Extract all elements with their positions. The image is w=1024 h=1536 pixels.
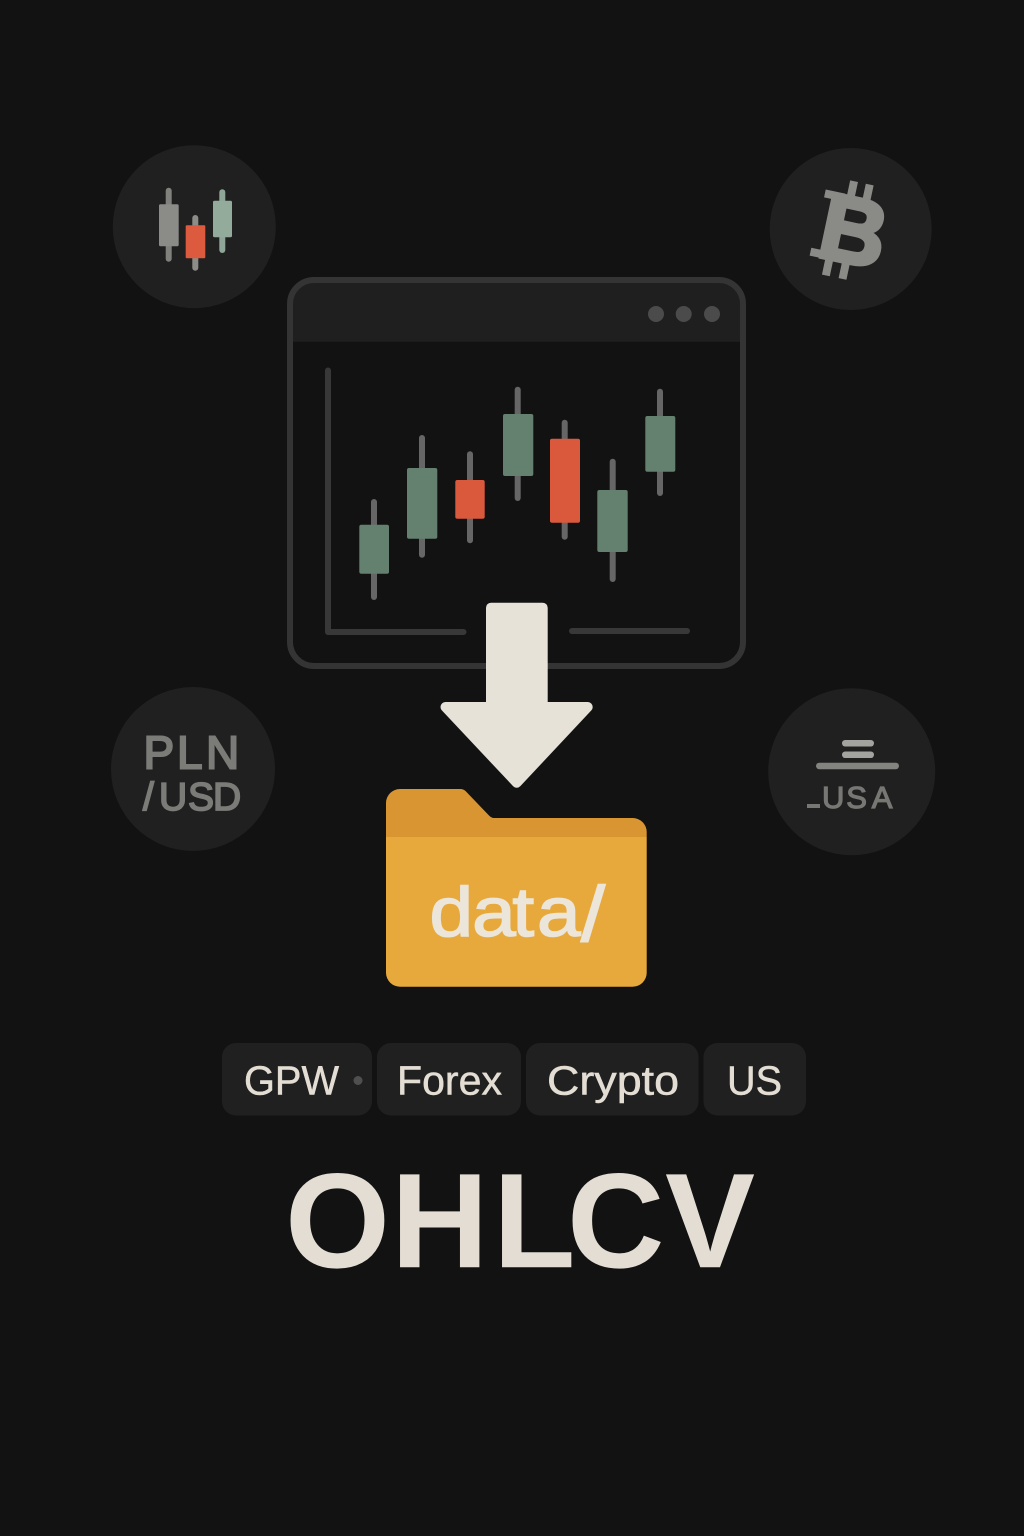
icon: USA market badge [768, 688, 935, 855]
tag: Forex [377, 1043, 521, 1116]
candlestick chart [359, 387, 675, 600]
folder label: / [581, 870, 605, 958]
icon: bitcoin badge: B [811, 173, 897, 289]
tag: GPW [222, 1043, 372, 1116]
icon: USA market badge: USA [822, 780, 893, 815]
panel: chart window [290, 280, 743, 666]
chart axes [328, 370, 687, 632]
tag: US: US [727, 1058, 782, 1104]
icon: PLN/USD badge: PLN [144, 726, 239, 778]
icon: data folder [386, 789, 647, 987]
tag: Forex: Forex [397, 1058, 502, 1104]
tag: US [704, 1043, 806, 1116]
arrow: download [446, 608, 588, 783]
market tags [222, 1043, 806, 1116]
folder label: data [430, 873, 581, 951]
icon: bitcoin badge [770, 148, 932, 310]
tag: GPW: GPW [244, 1058, 339, 1104]
window control dots [648, 306, 720, 322]
icon: candlestick badge [113, 145, 276, 308]
tag: Crypto: Crypto [547, 1058, 679, 1104]
icon: PLN/USD badge: /USD [143, 776, 241, 819]
tag: Crypto [526, 1043, 698, 1116]
icon: PLN/USD badge [111, 687, 275, 851]
title: OHLCV [285, 1145, 755, 1296]
